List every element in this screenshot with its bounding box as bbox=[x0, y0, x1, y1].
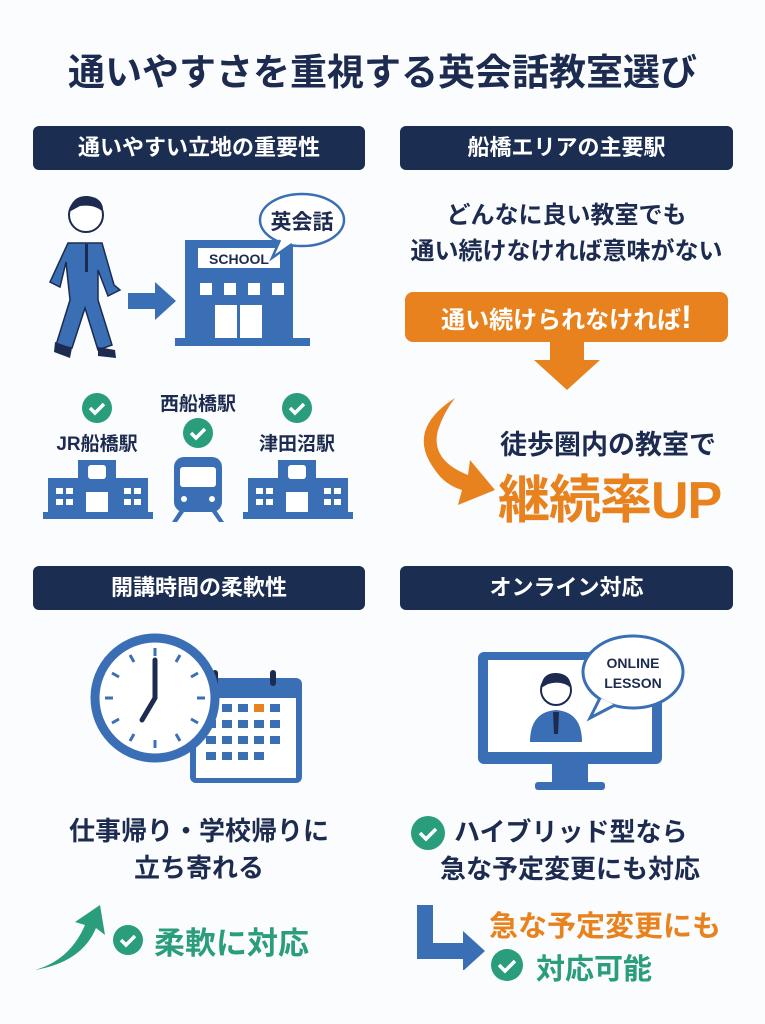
header: hours bbox=[33, 566, 365, 610]
checks bbox=[82, 393, 312, 448]
panel: location illustration: 西船橋駅 bbox=[160, 393, 236, 415]
icon: monitor with teacher: ONLINE bbox=[607, 655, 659, 671]
header: stations bbox=[400, 126, 733, 170]
icon: school building: SCHOOL bbox=[209, 251, 269, 267]
panel: location illustration bbox=[43, 192, 353, 522]
header: stations: 船橋エリアの主要駅 bbox=[467, 135, 666, 160]
callout: 英会話: 英会話 bbox=[270, 211, 334, 234]
text: message bbox=[410, 202, 722, 265]
header: online: オンライン対応 bbox=[489, 575, 644, 600]
result: flexible: 柔軟に対応 bbox=[154, 926, 309, 961]
result: flexible bbox=[35, 905, 309, 970]
callout: orange box bbox=[405, 292, 728, 342]
icon: school building bbox=[175, 240, 310, 346]
icon: monitor with teacher: LESSON bbox=[604, 675, 662, 691]
check bbox=[113, 925, 143, 955]
station labels: JR船橋駅 bbox=[56, 433, 138, 455]
icon: monitor with teacher bbox=[478, 634, 684, 790]
icon: clock and calendar bbox=[90, 634, 302, 783]
result: schedule change: 急な予定変更にも bbox=[489, 911, 721, 943]
text: hybrid: ハイブリッド型なら bbox=[454, 817, 687, 847]
text: hybrid bbox=[411, 816, 700, 884]
text: after work: 立ち寄れる bbox=[134, 853, 264, 883]
icon: blue L arrow bbox=[417, 905, 485, 970]
title: 通いやすさを重視する英会話教室選び bbox=[68, 52, 697, 93]
icon: stations bbox=[43, 457, 353, 522]
icon: green arrow bbox=[35, 905, 105, 970]
result: schedule change: 対応可能 bbox=[536, 954, 652, 986]
text: message: どんなに良い教室でも bbox=[446, 202, 686, 229]
text: walking distance: 徒歩圏内の教室で bbox=[500, 430, 716, 460]
text: after work bbox=[69, 816, 329, 883]
text: after work: 仕事帰り・学校帰りに bbox=[69, 816, 329, 846]
icon: walking person bbox=[50, 196, 120, 358]
header: online bbox=[400, 566, 733, 610]
callout: 英会話 bbox=[260, 194, 344, 258]
text: message: 通い続けなければ意味がない bbox=[410, 238, 722, 265]
header: hours: 開講時間の柔軟性 bbox=[111, 575, 287, 600]
header: location: 通いやすい立地の重要性 bbox=[78, 135, 320, 160]
callout: orange box: 通い続けられなければ! bbox=[441, 299, 692, 335]
header: location bbox=[33, 126, 365, 170]
panel: location illustration: 津田沼駅 bbox=[259, 433, 335, 455]
arrow bbox=[128, 282, 176, 320]
text: hybrid: 急な予定変更にも対応 bbox=[440, 854, 700, 884]
result: schedule change bbox=[417, 905, 721, 986]
text: retention up: 継続率UP bbox=[498, 472, 721, 530]
arrows: orange bbox=[424, 342, 600, 505]
